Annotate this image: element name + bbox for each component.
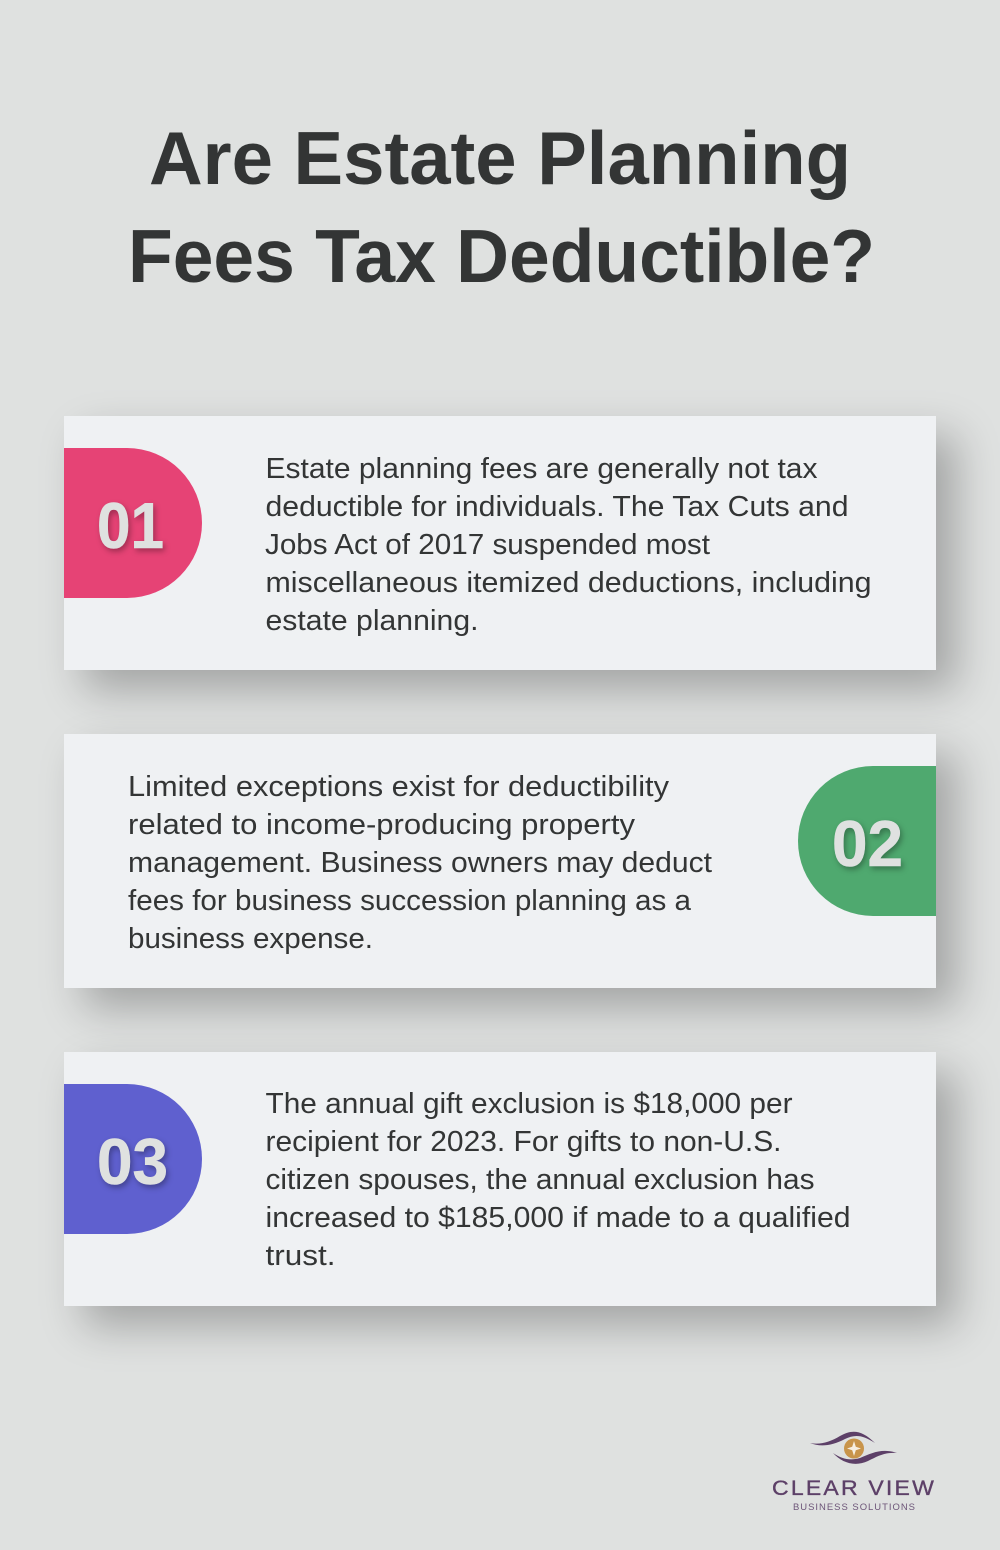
- text block 03: citizen spouses, the annual exclusion has: [266, 1164, 814, 1196]
- panel: card 03: [64, 1052, 936, 1306]
- panel: card 01: [64, 416, 936, 670]
- text block 01: Estate planning fees are generally not tax: [266, 453, 818, 485]
- text block 03: [266, 1088, 850, 1272]
- text block 01: estate planning.: [266, 605, 478, 637]
- text block 02: business expense.: [128, 923, 373, 955]
- text block 02: related to income-producing property: [128, 809, 636, 841]
- panel: card 02: [64, 734, 936, 988]
- text block 02: [128, 771, 712, 955]
- text block 01: miscellaneous itemized deductions, including: [266, 567, 871, 599]
- text block 02: Limited exceptions exist for deductibility: [128, 771, 670, 803]
- text block 03: trust.: [266, 1240, 336, 1272]
- logo: Clear View Business Solutions: [772, 1432, 936, 1513]
- badge 01: 01: [97, 489, 164, 562]
- text block 02: management. Business owners may deduct: [128, 847, 712, 879]
- badge 01: [64, 448, 202, 598]
- text block 02: fees for business succession planning as a: [128, 885, 692, 917]
- badge 02: [798, 766, 936, 916]
- text block 03: The annual gift exclusion is $18,000 per: [266, 1088, 793, 1120]
- text block 01: deductible for individuals. The Tax Cuts and: [266, 491, 848, 523]
- title: Fees Tax Deductible?: [128, 214, 875, 298]
- badge 03: [64, 1084, 202, 1234]
- title: [128, 116, 875, 298]
- text block 01: [265, 453, 871, 637]
- logo wordmark: CLEAR VIEW: [772, 1477, 936, 1500]
- badge 03: 03: [97, 1125, 168, 1198]
- badge 02: 02: [832, 807, 903, 880]
- text block 03: increased to $185,000 if made to a qualified: [266, 1202, 850, 1234]
- logo tagline: BUSINESS SOLUTIONS: [793, 1502, 916, 1513]
- text block 01: Jobs Act of 2017 suspended most: [265, 529, 710, 561]
- icon: eye: [810, 1432, 897, 1464]
- title: Are Estate Planning: [149, 116, 851, 200]
- text block 03: recipient for 2023. For gifts to non-U.S.: [266, 1126, 782, 1158]
